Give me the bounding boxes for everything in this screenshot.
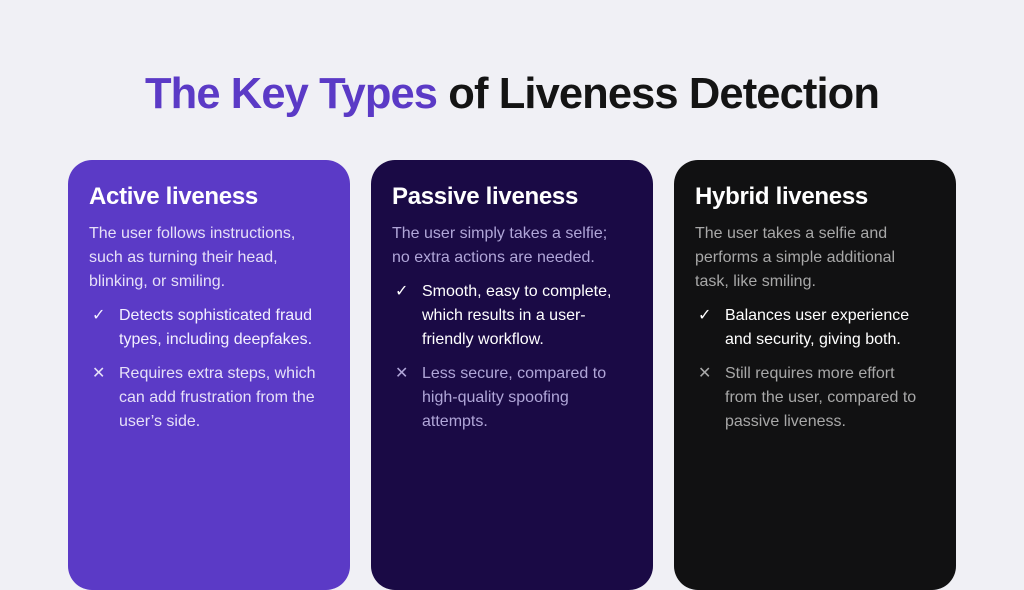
pro: hybrid: and security, giving both. (725, 331, 901, 348)
title: The Key Types of Liveness Detection (145, 70, 879, 118)
pro: passive (395, 283, 611, 348)
heading: passive: Passive liveness (392, 183, 578, 210)
pro: passive: which results in a user- (422, 307, 586, 324)
text: hybrid description (695, 225, 895, 290)
con: passive: ✕ (395, 365, 408, 382)
text: hybrid description: performs a simple additional (695, 249, 895, 266)
con: active: user’s side. (119, 413, 200, 430)
text: active description: such as turning their head, (89, 249, 278, 266)
panel: hybrid liveness (674, 160, 956, 590)
text: passive description: no extra actions are needed. (392, 249, 595, 266)
pro: hybrid (698, 307, 909, 348)
text: hybrid description: task, like smiling. (695, 273, 816, 290)
pro: passive: friendly workflow. (422, 331, 544, 348)
text: active description: The user follows instructions, (89, 225, 295, 242)
con: hybrid: passive liveness. (725, 413, 846, 430)
text: active description (89, 225, 295, 290)
heading: hybrid: Hybrid liveness (695, 183, 868, 210)
text: passive description: The user simply takes a selfie; (392, 225, 607, 242)
pro: hybrid: Balances user experience (725, 307, 909, 324)
con: hybrid: Still requires more effort (725, 365, 895, 382)
pro: active: ✓ (92, 307, 105, 324)
con: active: ✕ (92, 365, 105, 382)
con: active: Requires extra steps, which (119, 365, 316, 382)
heading: active: Active liveness (89, 183, 258, 210)
text: active description: blinking, or smiling. (89, 273, 225, 290)
panel: passive liveness (371, 160, 653, 590)
text: hybrid description: The user takes a selfie and (695, 225, 887, 242)
pro: passive: ✓ (395, 283, 408, 300)
con: hybrid (698, 365, 916, 430)
pro: active: types, including deepfakes. (119, 331, 312, 348)
panel: active liveness (68, 160, 350, 590)
con: passive: high-quality spoofing (422, 389, 569, 406)
pro: active: Detects sophisticated fraud (119, 307, 312, 324)
con: hybrid: from the user, compared to (725, 389, 916, 406)
pro: active (92, 307, 312, 348)
con: hybrid: ✕ (698, 365, 711, 382)
con: active (92, 365, 316, 430)
con: passive: Less secure, compared to (422, 365, 606, 382)
con: passive (395, 365, 606, 430)
con: passive: attempts. (422, 413, 488, 430)
pro: hybrid: ✓ (698, 307, 711, 324)
con: active: can add frustration from the (119, 389, 315, 406)
pro: passive: Smooth, easy to complete, (422, 283, 611, 300)
text: passive description (392, 225, 607, 266)
